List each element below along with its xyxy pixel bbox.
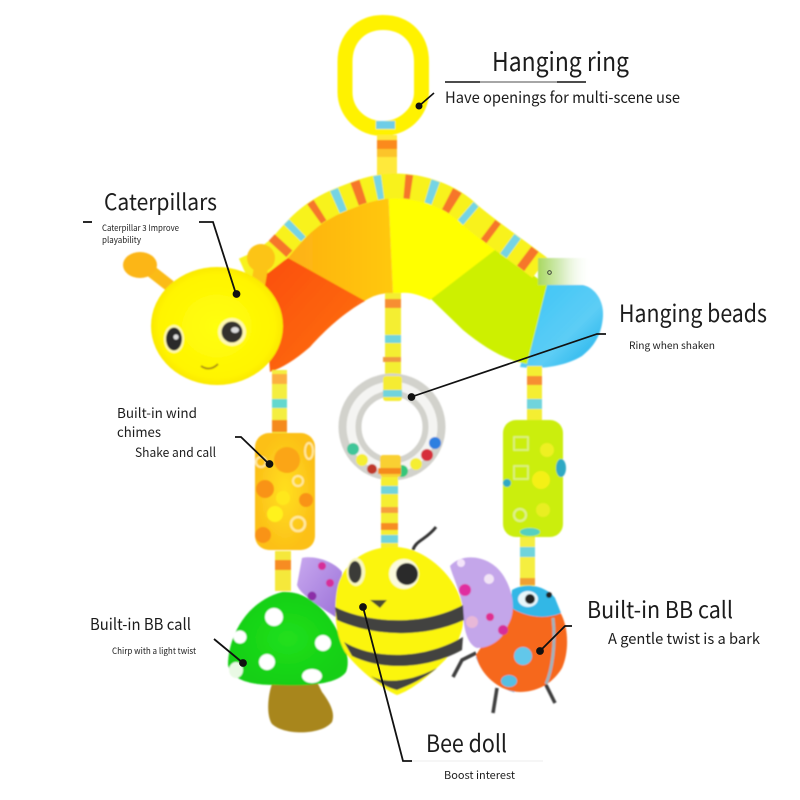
small circle mark (548, 271, 551, 274)
label: wind chimes (117, 402, 216, 461)
bee wing: right (450, 557, 513, 648)
heading: Hanging beads (619, 294, 767, 329)
body segment: lime (430, 245, 547, 364)
body segment: blue tail (520, 285, 603, 368)
antenna: left (123, 252, 170, 286)
label: mushroom BB call (90, 611, 197, 657)
leader line: bee doll (360, 604, 543, 761)
clear rattle ring with beads (347, 376, 441, 477)
label: bee doll (426, 724, 515, 783)
wind chime: orange (255, 433, 315, 550)
description: Have openings for multi-scene use (445, 86, 680, 108)
heading: Caterpillars (104, 185, 217, 217)
leader line: hanging beads (408, 334, 606, 400)
caterpillar head (151, 267, 283, 385)
heading: Built-in BB call (587, 591, 733, 625)
ladybug (453, 586, 567, 713)
bee wing: left (297, 557, 342, 620)
description: A gentle twist is a bark (608, 628, 761, 649)
bee doll (335, 527, 464, 695)
mushroom (228, 592, 348, 732)
strap: rattle to bee (378, 455, 401, 549)
strap: left chime (272, 370, 287, 436)
description line 2: playability (102, 234, 142, 246)
heading: Built-in BB call (90, 611, 191, 635)
label: ladybug BB call (587, 591, 761, 649)
antenna: right (247, 244, 275, 285)
strap: middle (383, 293, 401, 400)
leader line: mushroom BB call (214, 639, 246, 666)
heading: Bee doll (426, 724, 507, 759)
wind chime: lime (503, 420, 566, 537)
strap: right chime (527, 366, 542, 424)
illustration: caterpillar hanging toy (123, 22, 603, 732)
body segment: amber (285, 186, 393, 302)
strap: below orange chime (275, 551, 291, 591)
body segment: orange (263, 258, 365, 372)
heading: Built-in wind (117, 402, 197, 422)
leader line: hanging ring (416, 82, 586, 109)
body segment: yellow (388, 186, 495, 300)
leader line: wind chimes (235, 437, 272, 467)
heading line 2: chimes (117, 421, 161, 441)
label: caterpillars (102, 185, 217, 246)
description: Ring when shaken (629, 337, 715, 352)
strap: below lime chime (520, 537, 535, 587)
label: hanging beads (619, 294, 767, 352)
description: Boost interest (444, 767, 515, 783)
description: Caterpillar 3 Improve (102, 222, 179, 234)
hanging ring (345, 22, 429, 129)
leader line: ladybug BB call (537, 626, 572, 654)
green smudge patch (538, 258, 592, 285)
description: Chirp with a light twist (112, 645, 197, 657)
body frill stripes (244, 186, 540, 270)
leader line: caterpillars (83, 222, 240, 297)
strap: ring to body (377, 135, 397, 195)
description: Shake and call (135, 442, 216, 461)
label: hanging ring (445, 42, 680, 108)
heading: Hanging ring (492, 42, 629, 79)
